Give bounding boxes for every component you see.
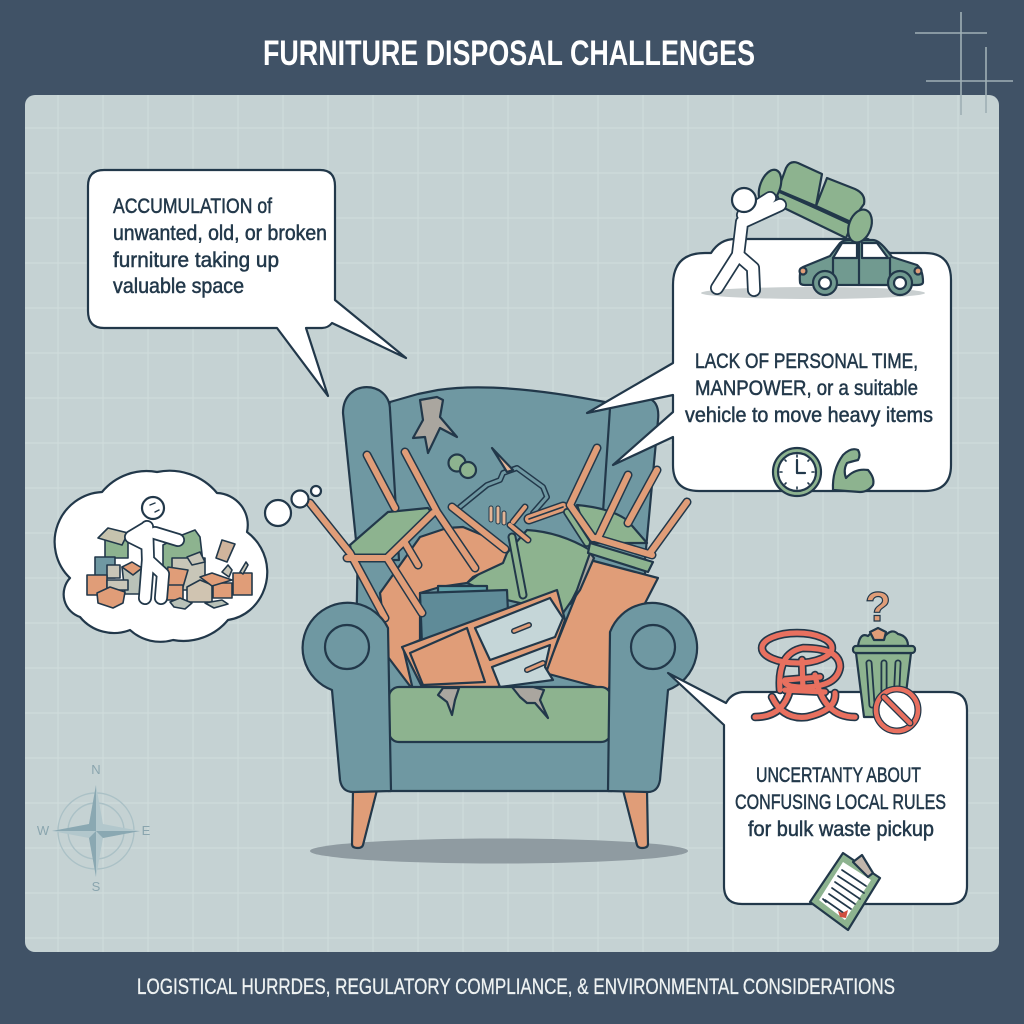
armchair with piled furniture xyxy=(303,387,697,848)
main panel xyxy=(25,95,999,952)
floor shadow xyxy=(310,838,688,864)
broken orange strips xyxy=(452,507,563,595)
green cushion heap xyxy=(467,530,590,613)
pile of boxes xyxy=(87,528,252,609)
chair left wing xyxy=(343,387,399,560)
mover figure xyxy=(717,188,780,290)
stick figure standing in clutter xyxy=(131,497,178,598)
right arm xyxy=(608,603,697,792)
illustration: person lifting sofa onto car xyxy=(717,162,923,295)
icon: trash can with no sign xyxy=(853,628,918,731)
thought bubble: cluttered room xyxy=(55,471,321,642)
car xyxy=(800,240,923,295)
icon: clipboard checklist xyxy=(810,853,880,930)
title: FURNITURE DISPOSAL CHALLENGES xyxy=(263,34,755,73)
left arm xyxy=(303,603,391,792)
bubble text: accumulation: ACCUMULATION of xyxy=(113,195,272,218)
right upturned chair xyxy=(545,448,687,690)
green circles xyxy=(448,454,476,478)
chair legs xyxy=(352,790,648,848)
bubble text: accumulation: valuable space xyxy=(113,275,244,298)
bubble text: accumulation: unwanted, old, or broken xyxy=(113,222,327,245)
bubble text: lack of time: vehicle to move heavy items xyxy=(685,404,933,427)
seat cushion xyxy=(389,687,611,742)
speech bubble: uncertainty xyxy=(668,673,967,904)
dresser with drawers xyxy=(402,590,565,687)
orange sofa heap xyxy=(380,527,507,690)
bubble text: uncertainty: UNCERTANTY ABOUT xyxy=(756,764,921,787)
icon: question mark: ? xyxy=(865,583,891,630)
bubble text: lack of time: LACK OF PERSONAL TIME, xyxy=(695,350,918,373)
bubble text: uncertainty: CONFUSING LOCAL RULES xyxy=(735,791,946,814)
briefcase xyxy=(420,586,508,645)
tear in back fabric xyxy=(413,397,457,453)
seat tears xyxy=(438,687,548,718)
icon: compass rose: W xyxy=(37,823,50,838)
teal wire frame and spike xyxy=(460,448,547,523)
bubble text: uncertainty xyxy=(735,764,946,841)
bubble text: lack of time: MANPOWER, or a suitable xyxy=(695,377,918,400)
bubble text: accumulation: furniture taking up xyxy=(113,249,279,272)
sofa xyxy=(754,162,876,246)
speech bubble: lack of time xyxy=(587,239,951,496)
icon: flexed arm xyxy=(833,449,873,492)
bubble text: uncertainty: for bulk waste pickup xyxy=(748,818,934,841)
icon: clock xyxy=(773,448,821,496)
left upturned chair xyxy=(310,452,475,618)
icon: compass rose: N xyxy=(91,762,101,777)
ground shadow under mover xyxy=(701,287,925,299)
chair back xyxy=(355,387,658,700)
speech bubble: accumulation xyxy=(88,170,406,396)
chair base xyxy=(388,738,612,791)
icon: compass rose: S xyxy=(92,879,101,894)
icon: compass rose: E xyxy=(142,823,151,838)
icon: compass rose xyxy=(37,762,151,894)
bubble text: lack of time xyxy=(685,350,933,427)
decorative crosshair lines xyxy=(915,12,1013,115)
icon: tangled red rope xyxy=(755,633,855,717)
thought trail circles xyxy=(265,486,321,526)
bubble text: accumulation xyxy=(113,195,327,298)
